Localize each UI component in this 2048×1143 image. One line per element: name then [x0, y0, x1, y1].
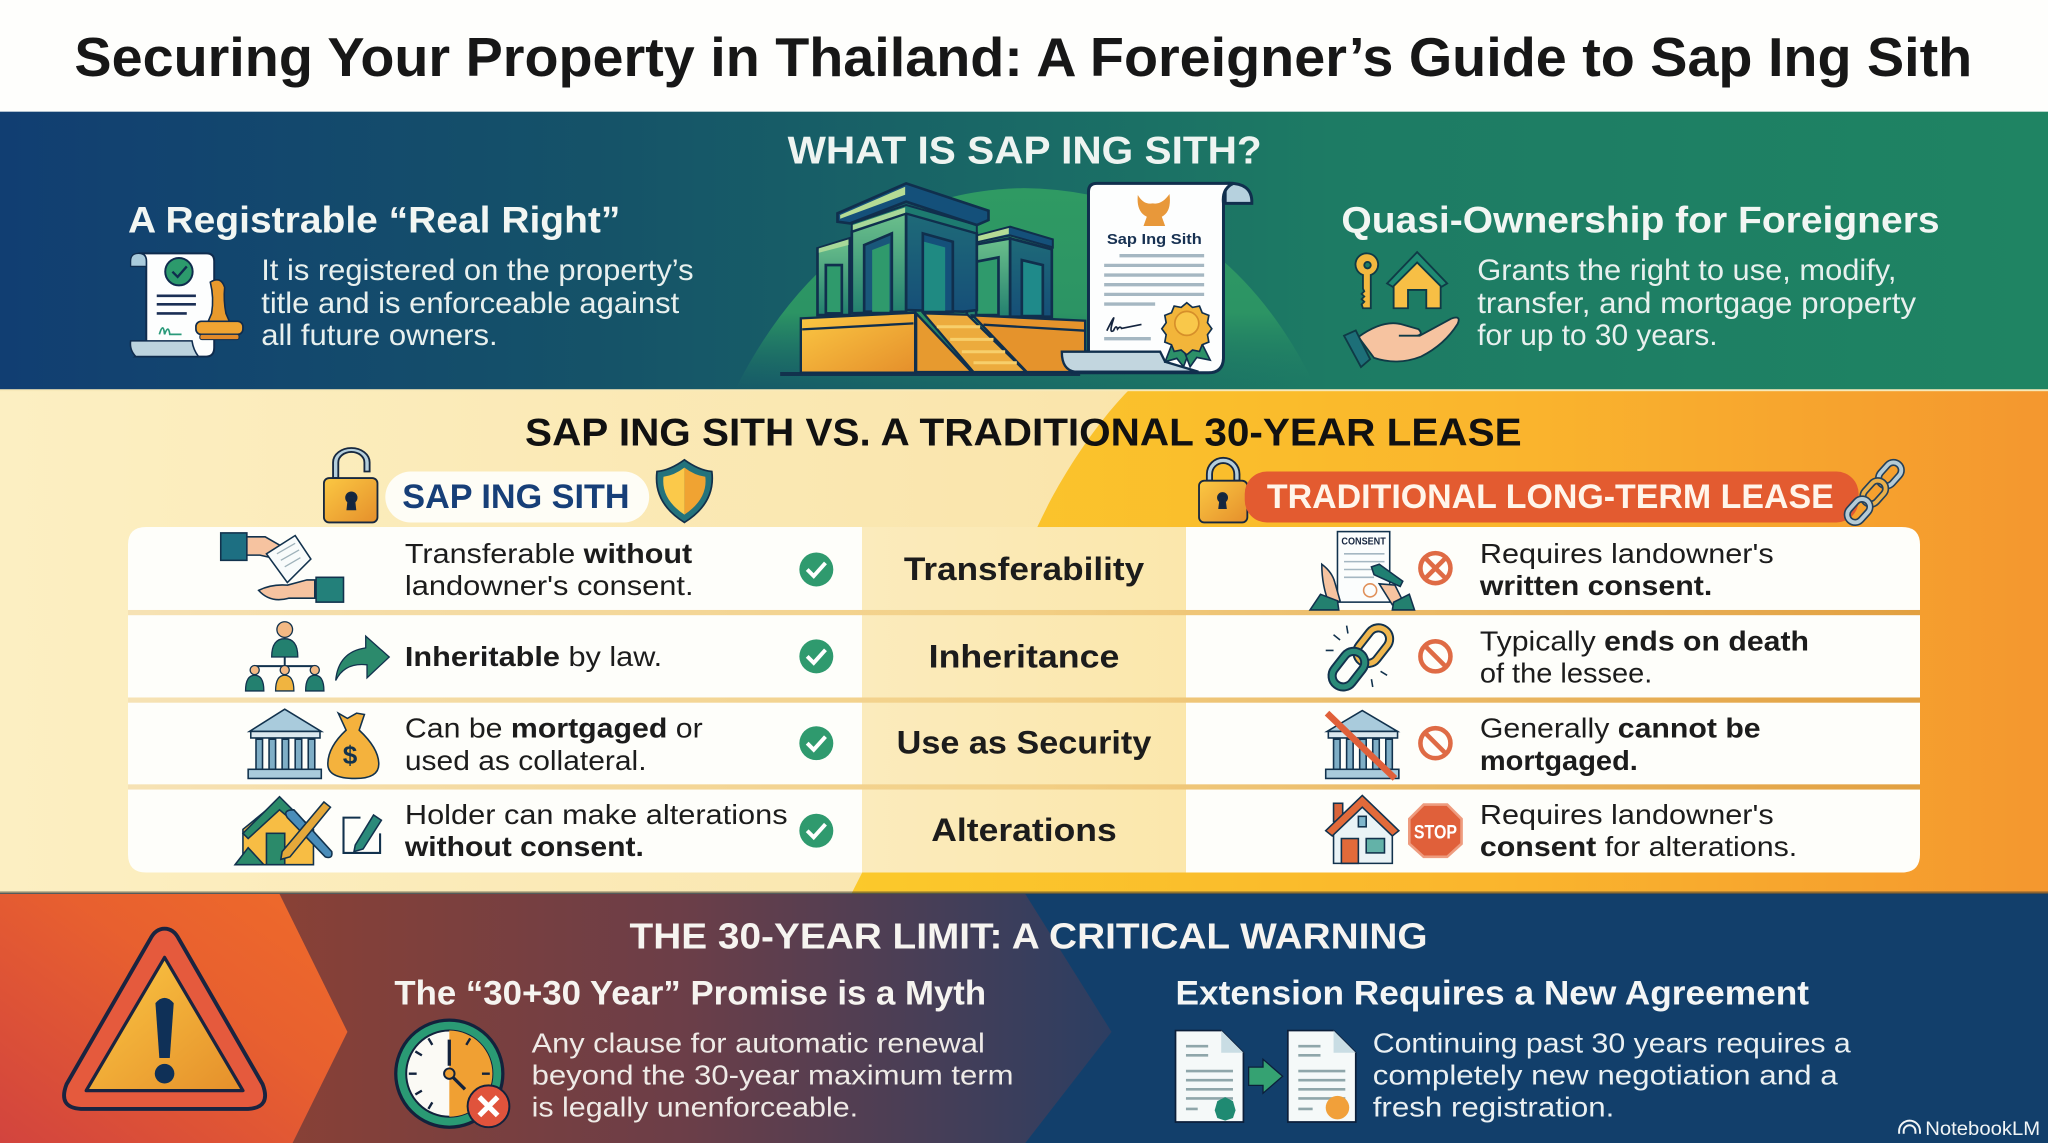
text block: extension — [1176, 974, 1852, 1123]
section heading: comparison: SAP ING SITH VS. A TRADITIONAL 30-YEAR LEASE — [525, 411, 1522, 454]
text block: 30+30 myth: Any clause for automatic renewal — [532, 1028, 985, 1059]
row: use as security: mortgaged. — [1480, 745, 1638, 776]
text block: registrable real right: title and is enforceable against — [261, 287, 679, 320]
row: transferability: Requires landowner's — [1480, 538, 1774, 569]
column header: traditional lease: TRADITIONAL LONG-TERM LEASE — [1267, 478, 1834, 516]
row: inheritance — [405, 625, 1809, 688]
green dome backdrop — [735, 188, 1317, 389]
text block: extension: fresh registration. — [1373, 1092, 1614, 1123]
panel: left column table — [128, 527, 862, 872]
row: use as security: used as collateral. — [405, 745, 647, 776]
panel: 30-year warning — [0, 891, 2048, 1143]
icon: open padlock — [324, 448, 377, 522]
icon: document renewal — [1176, 1031, 1356, 1122]
text block: 30+30 myth: beyond the 30-year maximum term — [532, 1060, 1014, 1091]
title: Securing Your Property in Thailand: A Foreigner’s Guide to Sap Ing Sith — [74, 26, 1972, 88]
left wing — [817, 238, 849, 315]
brand: notebooklm: NotebookLM — [1925, 1118, 2040, 1140]
row: use as security: Use as Security — [897, 724, 1151, 761]
icon: sap ing sith certificate scroll — [1062, 183, 1252, 373]
row: transferability: written consent. — [1479, 570, 1712, 601]
text block: quasi-ownership — [1341, 198, 1940, 352]
row: transferability: Transferable without — [405, 538, 692, 569]
row: inheritance: Inheritance — [929, 637, 1119, 674]
row: inheritance: of the lessee. — [1480, 657, 1652, 688]
text block: extension: completely new negotiation and a — [1373, 1060, 1839, 1091]
icon: prohibition sign — [1420, 641, 1450, 671]
row: use as security: Generally cannot be — [1480, 712, 1761, 743]
row: transferability: landowner's consent. — [405, 570, 694, 601]
right wing — [967, 238, 1010, 317]
icon: shield — [657, 460, 712, 522]
text block: extension: Continuing past 30 years requires a — [1373, 1028, 1852, 1059]
row: alterations: consent for alterations. — [1480, 831, 1797, 862]
icon: chain — [1844, 459, 1905, 526]
section heading: what is: WHAT IS SAP ING SITH? — [788, 129, 1262, 172]
icon: key, house and hand — [1344, 252, 1459, 367]
center tower — [852, 213, 906, 313]
row: use as security — [405, 712, 1761, 776]
text block: registrable real right: It is registered on the property’s — [261, 254, 694, 287]
row: alterations: without consent. — [404, 831, 644, 862]
row: transferability: Transferability — [904, 550, 1144, 587]
text block: quasi-ownership: Quasi-Ownership for Foreigners — [1341, 198, 1940, 240]
icon: broken chain — [1326, 623, 1394, 691]
column header: sap ing sith — [385, 472, 649, 522]
text block: quasi-ownership: transfer, and mortgage property — [1477, 287, 1916, 320]
icon: clock with x badge — [396, 1020, 509, 1127]
base — [801, 313, 915, 373]
icon: eagle emblem — [1138, 194, 1170, 226]
icon: bank and money bag — [248, 709, 379, 778]
text block: registrable real right: A Registrable “Real Right” — [128, 198, 620, 240]
icon: consent form and hands — [1310, 532, 1415, 610]
icon: consent form and hands: CONSENT — [1341, 537, 1386, 548]
text block: quasi-ownership: Grants the right to use, modify, — [1477, 254, 1896, 287]
panel: what is sap ing sith — [0, 112, 2048, 390]
text block: registrable real right: all future owners. — [261, 319, 498, 352]
text block: extension: Extension Requires a New Agreement — [1176, 974, 1809, 1012]
text block: registrable real right — [128, 198, 694, 352]
yellow curved backdrop — [852, 391, 2048, 893]
row: alterations: Holder can make alterations — [405, 799, 788, 830]
icon: hands passing document — [221, 533, 344, 602]
text block: 30+30 myth: is legally unenforceable. — [532, 1092, 858, 1123]
text block: 30+30 myth: The “30+30 Year” Promise is a Myth — [394, 974, 986, 1012]
center column — [862, 527, 1186, 872]
row: alterations: Alterations — [931, 811, 1117, 848]
icon: inheritance tree and arrow — [246, 622, 389, 691]
icon: closed padlock — [1199, 458, 1247, 522]
text block: 30+30 myth — [394, 974, 1014, 1123]
icon: prohibition sign — [1420, 728, 1450, 758]
row: inheritance: Typically ends on death — [1480, 625, 1809, 656]
row: transferability — [405, 538, 1774, 601]
icon: bank and money bag: $ — [343, 740, 358, 770]
row separators — [128, 610, 1920, 790]
panel: comparison section — [0, 389, 2048, 893]
column header: traditional lease — [1245, 472, 1859, 522]
icon: house — [1326, 795, 1399, 863]
row: alterations — [404, 799, 1797, 862]
icon: red cross circle — [1420, 553, 1450, 583]
icon: crossed out bank — [1326, 711, 1399, 778]
icon: stop sign — [1409, 805, 1462, 857]
icons: green check marks — [799, 552, 833, 848]
icon: registered document and stamp — [130, 253, 243, 357]
icon: building on gold base — [780, 183, 1085, 374]
icon: stop sign: STOP — [1414, 823, 1457, 844]
icon: warning triangle — [64, 929, 265, 1109]
icon: ribbon seal — [1165, 340, 1192, 367]
icon: house with tools and edit — [235, 797, 381, 865]
panel: right column table — [1186, 527, 1920, 872]
brown chevron — [261, 894, 1112, 1143]
row: inheritance: Inheritable by law. — [405, 641, 662, 672]
section heading: warning: THE 30-YEAR LIMIT: A CRITICAL WARNING — [630, 915, 1428, 956]
column header: sap ing sith: SAP ING SITH — [402, 478, 630, 516]
orange chevron — [0, 894, 347, 1143]
icon: sap ing sith certificate scroll: Sap Ing Sith — [1107, 231, 1202, 248]
row: alterations: Requires landowner's — [1480, 799, 1774, 830]
text block: quasi-ownership: for up to 30 years. — [1477, 319, 1718, 352]
row: use as security: Can be mortgaged or — [405, 712, 703, 743]
